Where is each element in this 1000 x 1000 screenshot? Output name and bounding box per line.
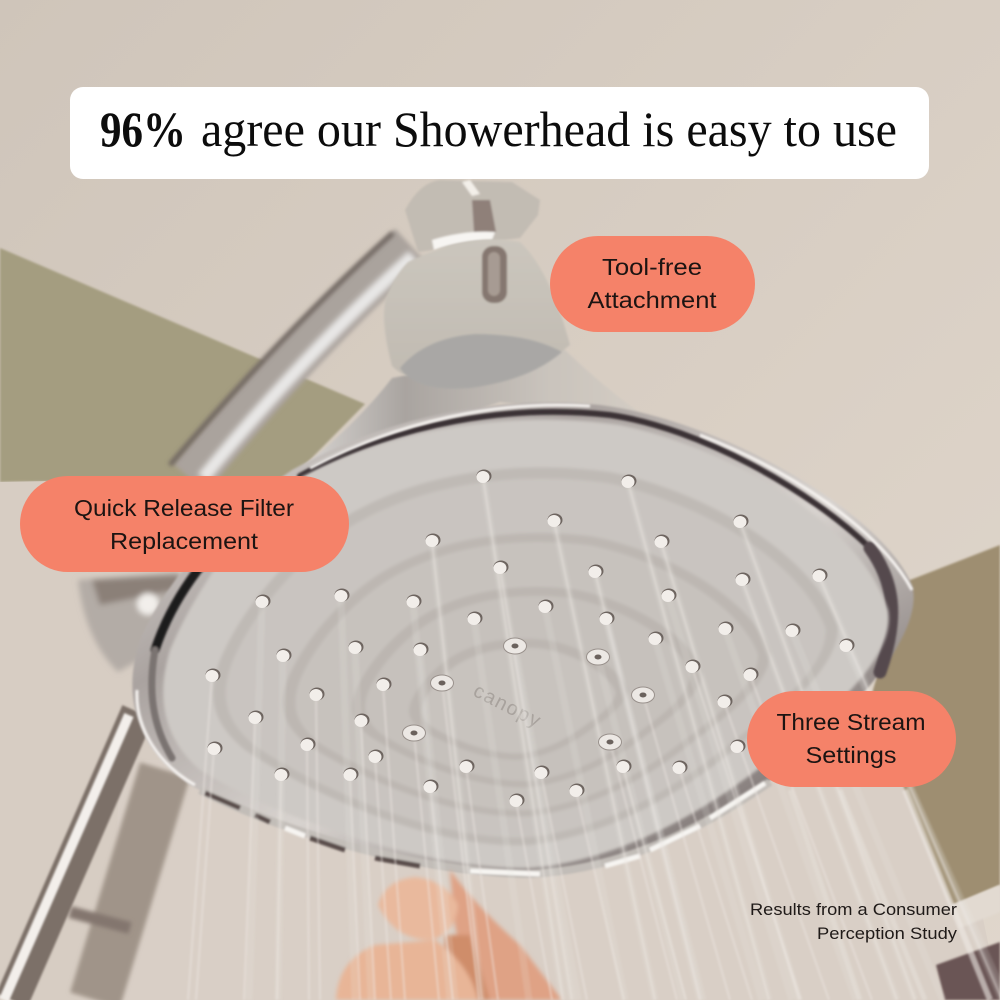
shower arm upper pipe <box>170 233 413 478</box>
callout: tool-free attachment: Attachment <box>588 287 717 313</box>
chrome neck <box>300 345 650 470</box>
footnote <box>750 901 958 943</box>
light rim highlights <box>137 405 912 785</box>
spray face and concentric rings <box>163 419 889 868</box>
background: bottom-right molding <box>936 885 1000 1000</box>
callout: quick release filter replacement <box>20 476 349 572</box>
title stat: 96% <box>100 101 186 157</box>
rear pipe <box>95 770 165 1000</box>
callout: three stream settings: Settings <box>806 742 896 768</box>
front pipe <box>12 712 138 1000</box>
bottom rim reflections <box>200 782 770 874</box>
callout: tool-free attachment <box>550 236 755 332</box>
blurred mount behind head <box>78 572 180 672</box>
filter housing <box>384 240 570 389</box>
background: lower back wall <box>110 760 1000 1000</box>
callout: quick release filter replacement: Quick Release Filter <box>74 495 294 521</box>
background: left lower wall <box>0 478 200 1000</box>
callout: three stream settings <box>747 691 956 787</box>
water streams <box>188 477 1000 1000</box>
dark rim bands <box>152 412 892 758</box>
far right stream <box>905 790 990 1000</box>
background: right olive wall <box>870 545 1000 905</box>
callout: three stream settings: Three Stream <box>776 709 926 735</box>
hand <box>336 870 562 1000</box>
outer chrome rim <box>132 403 914 876</box>
callout: quick release filter replacement: Replacement <box>110 528 258 554</box>
swivel joint <box>405 180 540 252</box>
wide faint streams <box>249 477 1000 1000</box>
collar on rear pipe <box>70 912 130 928</box>
title text: agree our Showerhead is easy to use <box>201 101 897 157</box>
footnote: Results from a Consumer <box>750 901 958 919</box>
thin bright streams <box>188 477 1000 1000</box>
nozzles <box>206 470 854 807</box>
title banner <box>70 87 929 179</box>
lower vertical pipes <box>4 712 165 1000</box>
engraved logo: canopy <box>470 680 545 733</box>
shower head <box>132 180 1000 1000</box>
callout: tool-free attachment: Tool-free <box>602 254 702 280</box>
footnote: Perception Study <box>817 925 958 943</box>
background: left olive wall <box>0 248 365 482</box>
